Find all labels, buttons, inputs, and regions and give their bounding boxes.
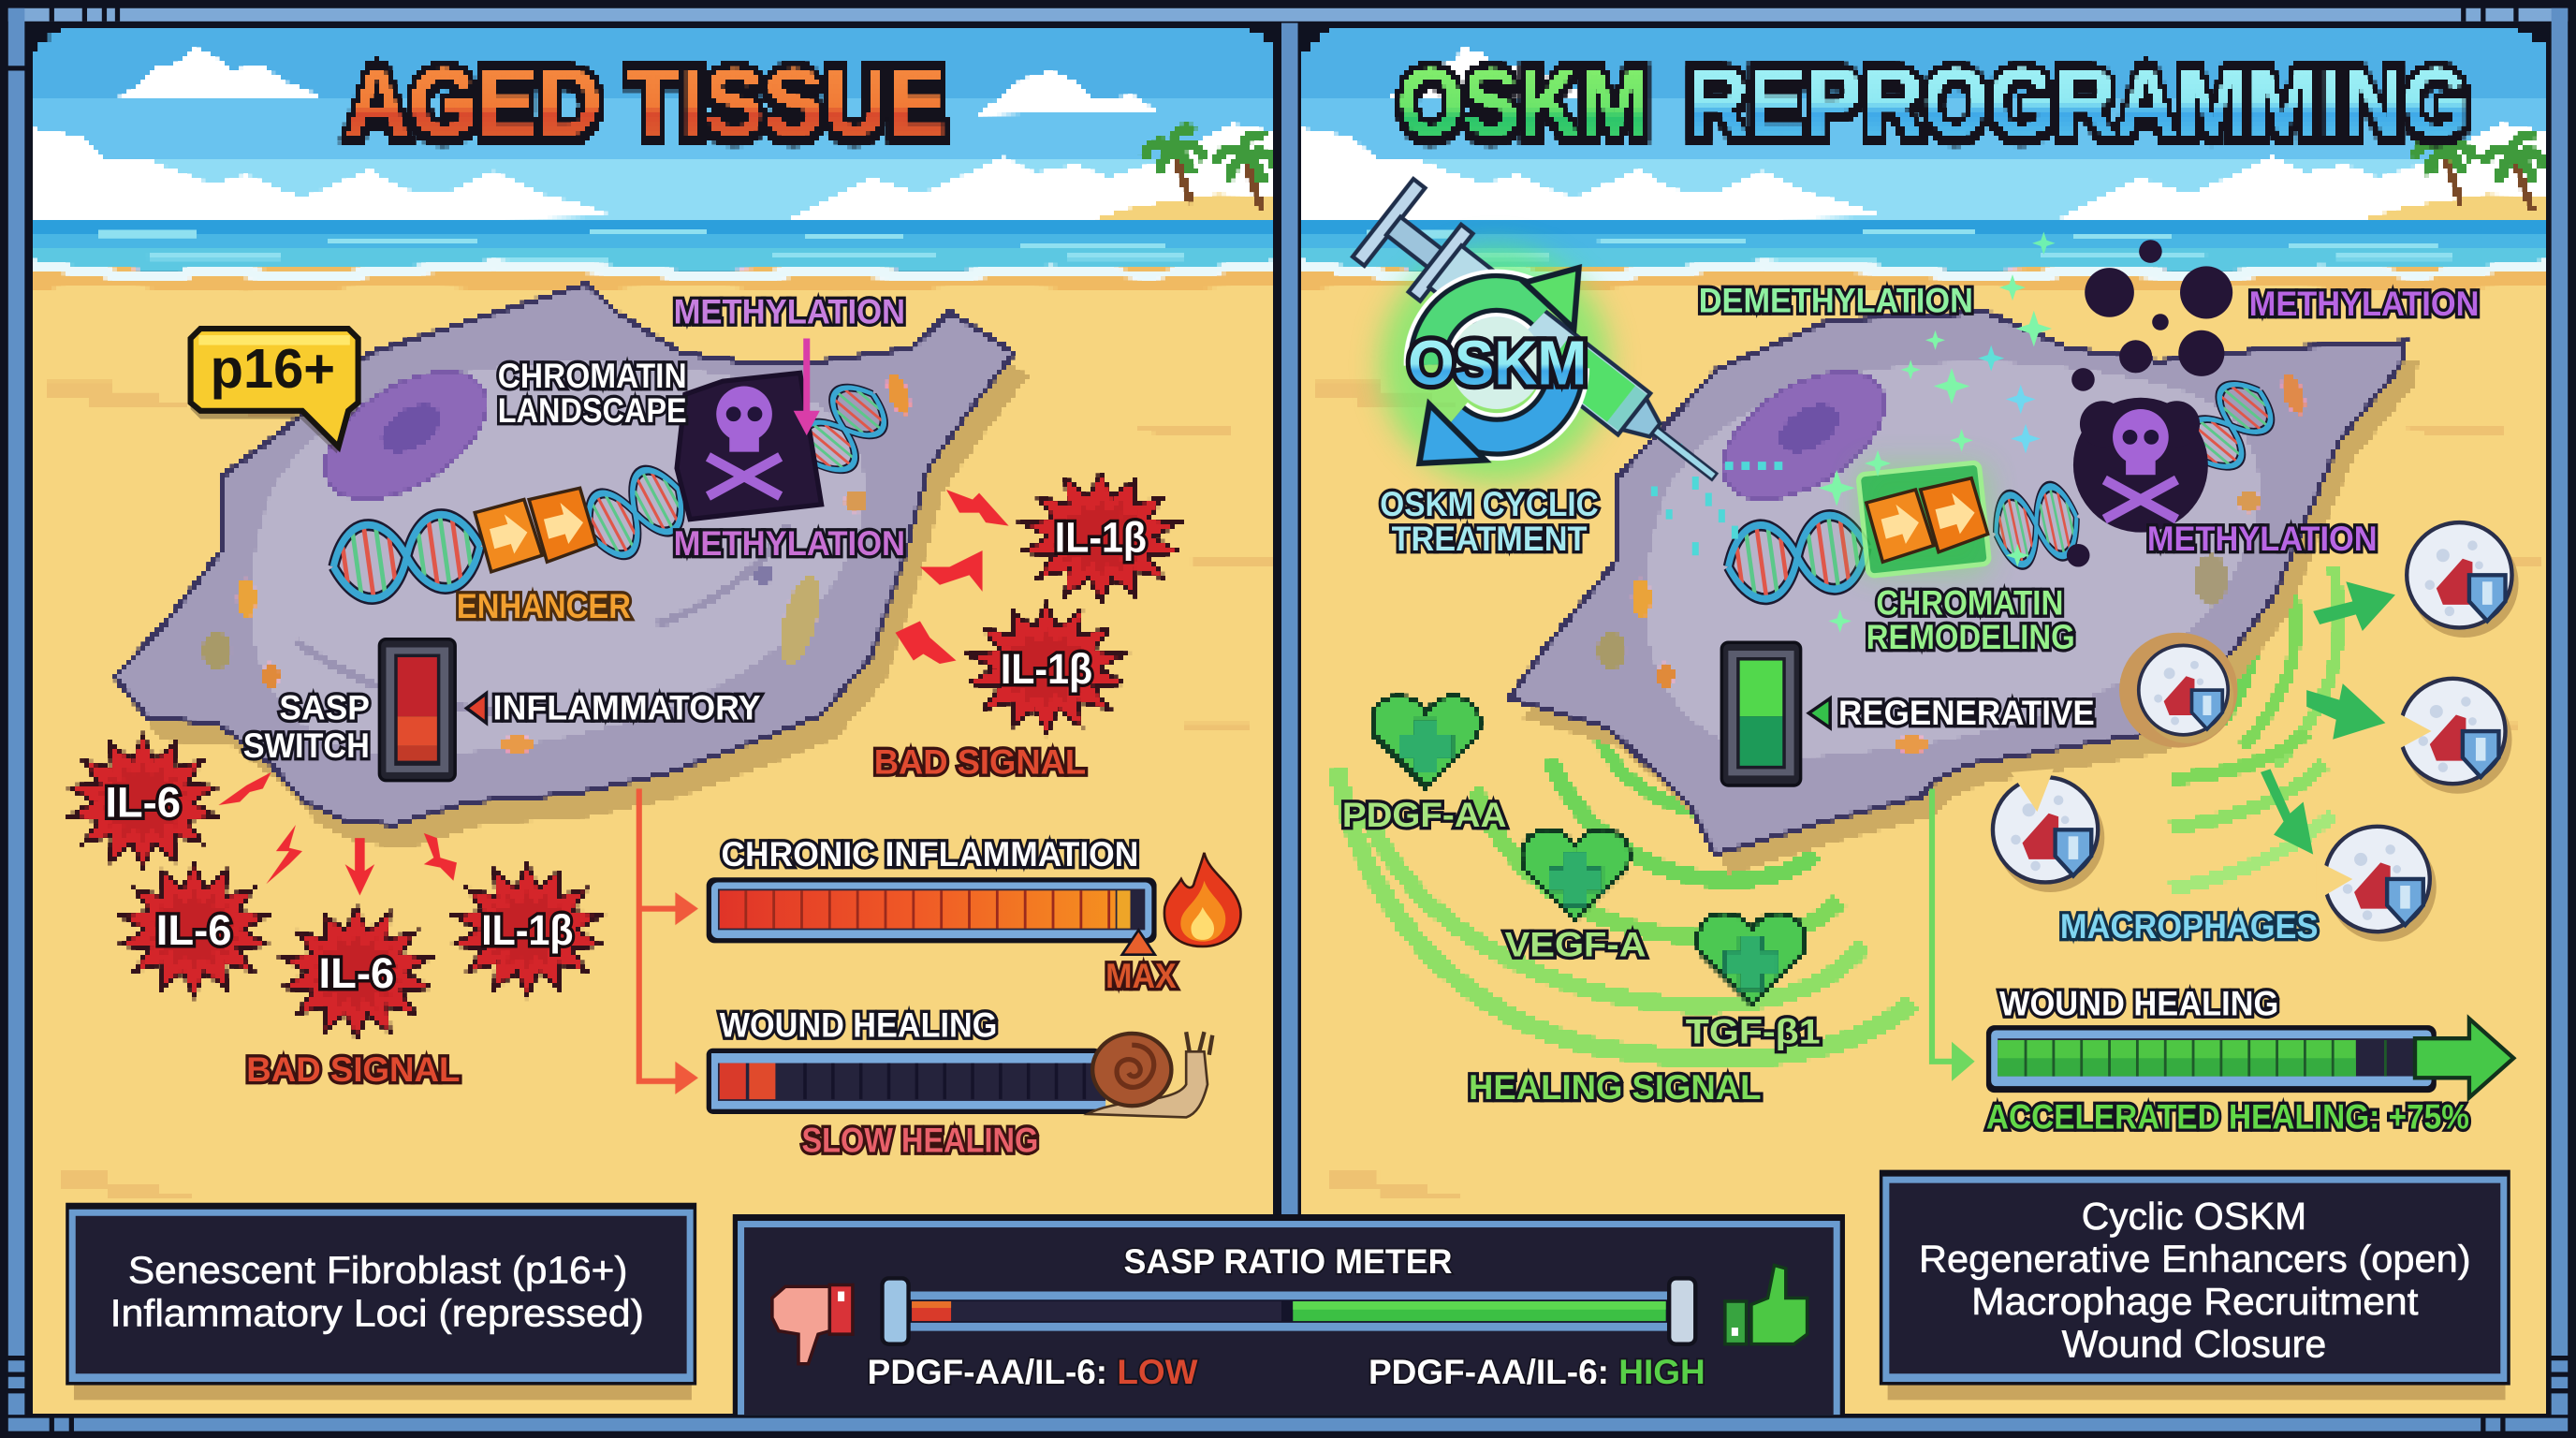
ratio low label: PDGF-AA/IL-6: LOW — [868, 1353, 1198, 1391]
panel: oskm summary: Cyclic OSKM — [2082, 1195, 2306, 1238]
panel: senescent summary — [66, 1203, 696, 1400]
title: oskm reprogramming — [1398, 49, 2469, 155]
oskm treated cell — [1510, 312, 2419, 874]
arrows: signal emission — [218, 490, 1009, 896]
aged labels: MAX — [1105, 957, 1177, 995]
aged labels: BAD SIGNAL — [874, 743, 1086, 782]
aged labels: SWITCH — [243, 726, 370, 765]
oskm labels: PDGF-AA — [1342, 796, 1506, 834]
aged labels: ENHANCER — [457, 587, 631, 625]
panel: oskm summary: Wound Closure — [2062, 1323, 2326, 1366]
icon: sparkles — [1651, 231, 2056, 633]
title: oskm reprogramming: OSKM — [1398, 49, 1649, 155]
panel: aged tissue background — [33, 26, 1275, 1413]
panel: oskm summary — [1880, 1170, 2510, 1400]
regenerative switch — [1721, 642, 1830, 785]
aged labels: IL-6 — [105, 778, 181, 826]
connector: healing — [1932, 788, 1975, 1081]
aged labels: CHRONIC INFLAMMATION — [721, 835, 1138, 873]
panel: oskm reprogramming artwork — [1338, 49, 2519, 1137]
oskm labels: METHYLATION — [2147, 520, 2378, 558]
aged labels: LANDSCAPE — [498, 391, 687, 430]
ratio high label: PDGF-AA/IL-6: HIGH — [1368, 1353, 1705, 1391]
macrophages — [1993, 522, 2519, 942]
arrows: macrophage recruitment — [2261, 581, 2395, 855]
oskm labels: MACROPHAGES — [2060, 907, 2318, 946]
oskm labels: OSKM — [1408, 330, 1587, 399]
aged labels: SLOW HEALING — [801, 1121, 1038, 1159]
bar: wound healing accelerated — [1986, 1019, 2513, 1097]
senescent fibroblast cell — [115, 285, 1029, 848]
icon: thumbs down — [772, 1284, 853, 1364]
icon: methylated skull block — [677, 373, 822, 520]
icon: growth factor hearts — [1372, 697, 1805, 1004]
oskm labels: VEGF-A — [1505, 925, 1647, 963]
arrow: accelerated — [2415, 1019, 2513, 1097]
callout: p16+: p16+ — [211, 337, 335, 400]
oskm labels: METHYLATION — [2249, 285, 2479, 323]
aged labels: IL-1β — [1001, 645, 1092, 693]
aged labels: CHROMATIN — [498, 357, 687, 395]
arrow: methylation — [794, 339, 820, 435]
enhancer open glowing — [1858, 462, 1989, 577]
enhancer blocks — [475, 488, 596, 572]
aged labels: BAD SIGNAL — [246, 1050, 460, 1089]
title: aged tissue: AGED TISSUE — [345, 49, 946, 155]
oskm labels: OSKM CYCLIC — [1380, 485, 1599, 523]
bar: wound healing slow — [707, 1049, 1105, 1114]
cytokine bursts — [69, 473, 1179, 1038]
icon: oskm syringe — [1353, 179, 1745, 516]
oskm labels: HEALING SIGNAL — [1469, 1068, 1761, 1107]
oskm labels: CHROMATIN — [1876, 583, 2063, 622]
title: oskm reprogramming: REPROGRAMMING — [1687, 49, 2469, 155]
dna and methylated chromatin — [1723, 240, 2282, 604]
aged labels: SASP — [279, 689, 370, 727]
oskm labels — [1342, 281, 2479, 1137]
oskm labels: DEMETHYLATION — [1699, 281, 1973, 319]
panel: sasp ratio meter — [733, 1214, 1845, 1415]
panel: aged tissue artwork — [69, 49, 1240, 1159]
methylation dots — [2067, 240, 2232, 567]
oskm labels: ACCELERATED HEALING: +75% — [1986, 1098, 2469, 1137]
oskm labels: WOUND HEALING — [1999, 985, 2278, 1023]
oskm labels: REMODELING — [1866, 618, 2075, 656]
bar: chronic inflammation — [707, 877, 1157, 955]
aged labels: INFLAMMATORY — [493, 689, 761, 727]
panel: oskm summary: Macrophage Recruitment — [1971, 1280, 2419, 1323]
icon: fire — [1164, 853, 1240, 946]
icon: snail — [1088, 1032, 1212, 1117]
sasp switch inflammatory — [379, 639, 487, 781]
panel: senescent summary: Inflammatory Loci (repressed) — [110, 1291, 644, 1334]
aged labels: IL-1β — [481, 906, 574, 954]
aged labels: METHYLATION — [674, 524, 905, 563]
aged labels: METHYLATION — [674, 293, 905, 331]
panel: sasp ratio meter: SASP RATIO METER — [1123, 1242, 1453, 1281]
panel: oskm reprogramming background — [1303, 26, 2545, 1413]
oskm labels: TREATMENT — [1392, 520, 1588, 558]
callout: p16+ — [191, 329, 359, 453]
dna and chromatin — [329, 339, 896, 604]
aged labels: IL-6 — [156, 906, 231, 954]
icon: thumbs up — [1725, 1265, 1808, 1344]
aged labels — [105, 293, 1177, 1159]
panel: oskm summary: Regenerative Enhancers (open) — [1919, 1237, 2471, 1280]
connector: outcome branch — [639, 788, 698, 1094]
healing signal arcs — [1338, 542, 2339, 1059]
panel: senescent summary: Senescent Fibroblast (p16+) — [128, 1249, 627, 1292]
aged labels: IL-6 — [318, 949, 394, 997]
meter track — [882, 1278, 1695, 1344]
marker: max — [1122, 930, 1155, 955]
aged labels: WOUND HEALING — [720, 1005, 997, 1044]
aged labels: IL-1β — [1055, 514, 1147, 562]
oskm labels: TGF-β1 — [1686, 1012, 1821, 1050]
icon: cycle arrows — [1427, 293, 1566, 437]
oskm labels: REGENERATIVE — [1838, 694, 2095, 732]
icon: skull blob — [2073, 398, 2208, 533]
